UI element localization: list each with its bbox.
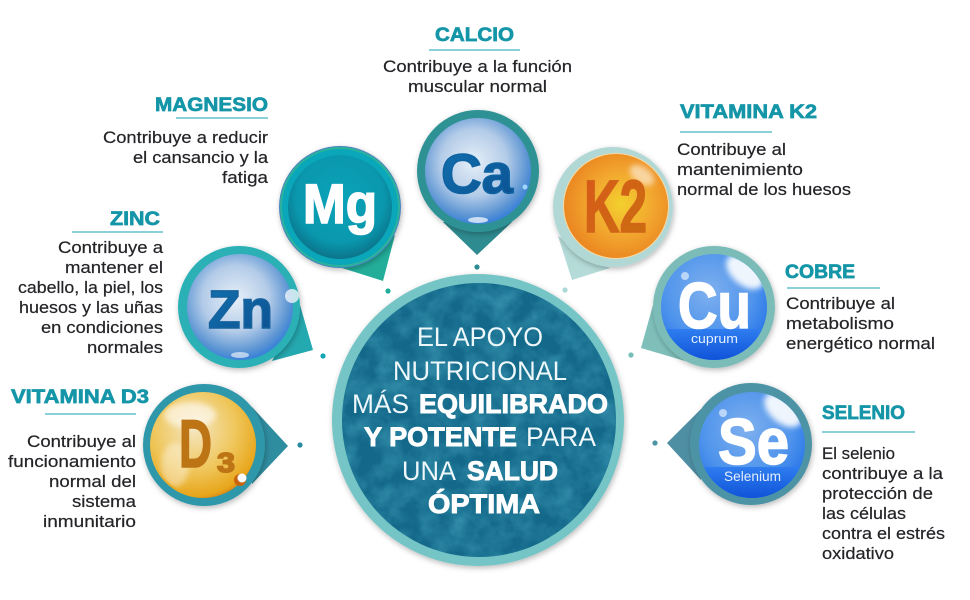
central message text: ÓPTIMA [428, 488, 540, 519]
heading block: selenio: El selenio [822, 445, 895, 463]
heading block: vitamina d3: funcionamiento [8, 453, 136, 471]
icon: vitamina d3 pin: D [179, 406, 212, 482]
heading block: selenio: SELENIO [822, 402, 905, 424]
heading block: zinc: en condiciones [41, 319, 163, 337]
heading block: zinc [18, 208, 164, 357]
central message text: PARA [526, 422, 596, 452]
central message text: Y POTENTE [364, 422, 517, 452]
heading block: cobre: COBRE [785, 261, 855, 283]
heading block: magnesio: el cansancio y la [133, 149, 269, 167]
heading block: vitamina d3: inmunitario [43, 513, 136, 531]
icon: vitamina d3 pin: 3 [217, 447, 235, 478]
heading block: selenio: oxidativo [822, 545, 894, 563]
icon: vitamina k2 pin [553, 147, 673, 280]
heading block: selenio: las células [822, 505, 906, 523]
heading block: vitamina d3: Contribuye al [27, 433, 136, 451]
heading block: calcio: Contribuye a la función [383, 58, 572, 76]
central message text: EQUILIBRADO [419, 389, 608, 419]
heading block: zinc: Contribuye a [58, 239, 164, 257]
heading block: selenio [822, 402, 945, 563]
icon: cobre pin: cuprum [691, 331, 738, 346]
heading block: magnesio: MAGNESIO [155, 94, 268, 116]
icon: selenio pin [667, 383, 812, 505]
central message text: UNA [402, 456, 456, 486]
icon: calcio pin [417, 110, 539, 255]
icon: selenio pin: Se [718, 405, 789, 478]
heading block: zinc: cabello, la piel, los [18, 279, 163, 297]
central circle [332, 274, 624, 566]
heading block: magnesio [103, 94, 269, 187]
dot: cobre [628, 352, 634, 358]
dot: magnesio [385, 288, 391, 294]
heading block: zinc: huesos y las uñas [19, 299, 163, 317]
heading block: zinc: ZINC [110, 208, 160, 230]
central message text [352, 322, 608, 519]
heading block: selenio: protección de [822, 485, 933, 503]
heading block: cobre: energético normal [786, 335, 935, 353]
icon: calcio pin: Ca [441, 142, 514, 205]
icon: zinc pin: Zn [208, 280, 273, 340]
heading block: calcio: muscular normal [408, 78, 547, 96]
heading block: vitamina k2 [677, 101, 851, 199]
heading block: selenio: contribuye a la [822, 465, 944, 483]
dot: vitamina d3 [297, 442, 303, 448]
heading block: cobre: Contribuye al [786, 295, 895, 313]
heading block: vitamina k2: VITAMINA K2 [680, 101, 817, 123]
central message text: EL APOYO [417, 322, 543, 352]
dot: zinc [320, 353, 326, 359]
icon: cobre pin: Cu [678, 269, 751, 342]
heading block: calcio: CALCIO [435, 24, 514, 46]
icon: zinc pin [178, 246, 313, 368]
icon: cobre pin [641, 246, 775, 368]
central message text: MÁS [352, 389, 409, 419]
icon: selenio pin: Selenium [724, 469, 781, 484]
heading block: calcio [383, 24, 572, 96]
heading block: zinc: normales [87, 339, 163, 357]
heading block: cobre: metabolismo [786, 315, 894, 333]
heading block: vitamina k2: Contribuye al [677, 141, 786, 159]
heading block: vitamina d3: sistema [72, 493, 137, 511]
icon: magnesio pin: Mg [303, 172, 377, 235]
heading block: vitamina d3: normal del [49, 473, 136, 491]
central message text: NUTRICIONAL [393, 356, 567, 386]
icon: vitamina d3 pin [143, 384, 288, 506]
heading block: magnesio: fatiga [222, 169, 269, 187]
heading block: vitamina k2: mantenimiento [677, 161, 803, 179]
heading block: cobre [785, 261, 935, 353]
dot: selenio [652, 440, 658, 446]
heading block: magnesio: Contribuye a reducir [103, 129, 269, 147]
heading block: selenio: contra el estrés [822, 525, 945, 543]
heading block: vitamina d3: VITAMINA D3 [11, 386, 149, 408]
icon: magnesio pin [279, 146, 401, 281]
dot: calcio [474, 264, 480, 270]
heading block: vitamina k2: normal de los huesos [677, 181, 851, 199]
heading block: zinc: mantener el [65, 259, 163, 277]
icon: vitamina k2 pin: K2 [584, 165, 647, 248]
dot: vitamina k2 [562, 287, 568, 293]
heading block: vitamina d3 [8, 386, 149, 531]
central message text: SALUD [467, 456, 558, 486]
